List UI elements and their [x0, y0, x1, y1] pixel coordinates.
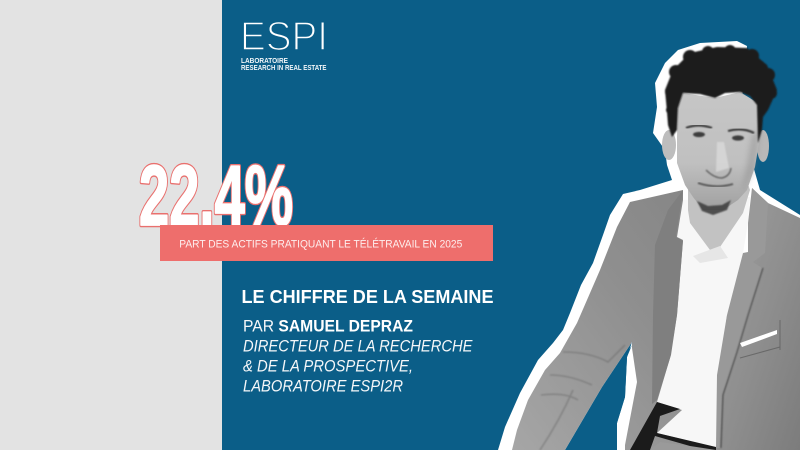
big number 22.4%: [139, 149, 293, 244]
right ear: [757, 130, 769, 162]
left eye: [693, 132, 705, 137]
white shirt: [657, 197, 750, 448]
neck: [688, 175, 750, 250]
nose highlight: [716, 142, 729, 172]
big number 22.4%: 22.4%: [139, 149, 293, 244]
author block: LABORATOIRE ESPI2R: [243, 378, 403, 396]
sleeve folds: [540, 345, 625, 450]
right lapel: [716, 188, 768, 448]
left lapel: [652, 190, 683, 404]
ESPI logo: LABORATOIRE: [241, 56, 288, 65]
pocket edge: [740, 320, 780, 358]
ESPI logo: ESPI: [240, 13, 328, 59]
big number 22.4%: 22.4%: [139, 149, 293, 244]
mouth: [698, 183, 733, 186]
jacket sleeve and torso: [512, 190, 700, 450]
face: [677, 92, 760, 210]
author block: PAR SAMUEL DEPRAZ: [243, 318, 413, 336]
curly hair: [665, 45, 777, 143]
nose shadow: [706, 168, 731, 178]
portrait photo: [498, 41, 800, 450]
author block: DIRECTEUR DE LA RECHERCHE: [243, 338, 473, 356]
left ear: [662, 130, 676, 160]
white cut-out outline: [498, 41, 800, 450]
coral caption banner: PART DES ACTIFS PRATIQUANT LE TÉLÉTRAVAIL EN 2025: [179, 237, 462, 250]
left eyebrow: [686, 126, 712, 128]
right eye: [732, 135, 744, 141]
ESPI logo: RESEARCH IN REAL ESTATE: [241, 63, 327, 72]
blue gap between arm and body: [565, 342, 632, 450]
pocket square: [740, 330, 777, 347]
grey side panel: [0, 0, 222, 450]
collar fold: [693, 246, 728, 263]
lapel shadow line: [721, 268, 763, 448]
heading: LE CHIFFRE DE LA SEMAINE: [242, 287, 494, 307]
trousers: [650, 442, 720, 450]
dark waist shadow and belt: [630, 402, 716, 450]
cheek shading: [742, 130, 760, 192]
goatee: [697, 200, 731, 215]
right eyebrow: [728, 129, 754, 133]
author block: [243, 318, 473, 396]
author block: & DE LA PROSPECTIVE,: [243, 358, 413, 376]
jacket right side: [715, 188, 800, 450]
coral caption banner: [160, 225, 493, 261]
